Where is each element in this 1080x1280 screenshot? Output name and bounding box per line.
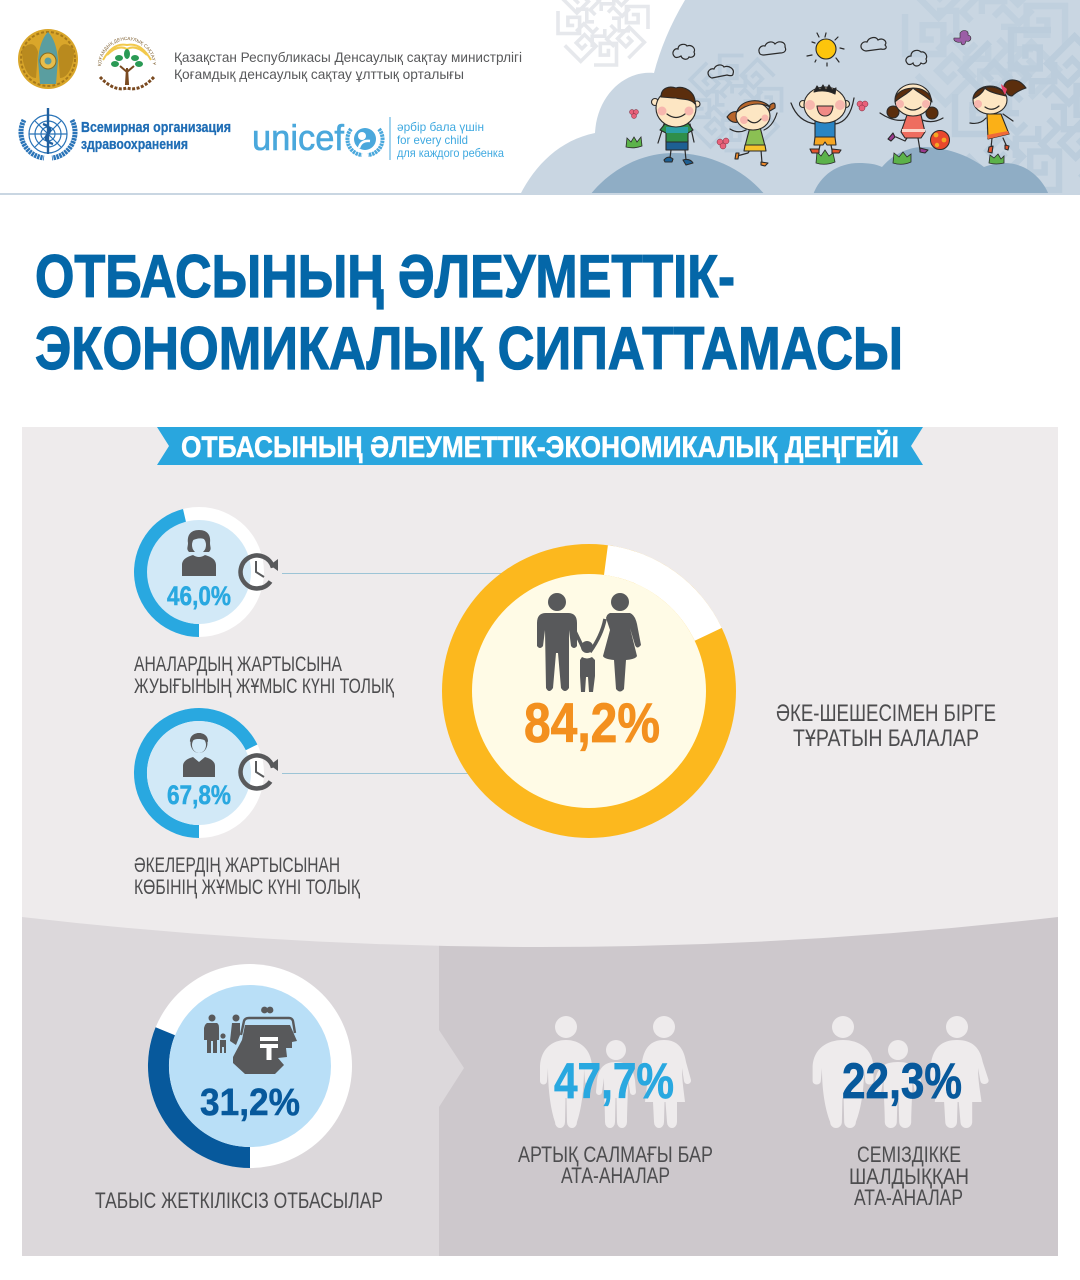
clouds xyxy=(673,38,927,78)
label: fathers: КӨБІНІҢ ЖҰМЫС КҮНІ ТОЛЫҚ xyxy=(134,876,361,899)
kid 3 xyxy=(791,85,854,153)
icon: family and wallet xyxy=(204,1007,297,1074)
icon: obese family xyxy=(813,1016,989,1128)
ministry text xyxy=(174,49,522,82)
butterfly and flowers xyxy=(630,31,971,149)
icon: clock xyxy=(241,555,278,588)
unicef tagline: для каждого ребенка xyxy=(397,146,504,160)
label: obese parents xyxy=(849,1142,969,1210)
value: 47,7% xyxy=(554,1053,674,1109)
sun xyxy=(807,33,844,66)
hills xyxy=(590,147,1049,195)
title xyxy=(35,243,903,382)
label: overweight parents: АТА-АНАЛАР xyxy=(561,1163,670,1188)
kid 1 xyxy=(652,87,700,165)
icon: overweight family xyxy=(540,1016,691,1128)
stat: overweight parents 47,7% xyxy=(540,1016,691,1128)
logo: national public health center xyxy=(98,36,156,90)
WHO text: Всемирная организация xyxy=(81,119,231,136)
value: 84,2% xyxy=(524,691,660,754)
donut: mothers 46,0% xyxy=(134,507,278,637)
title: ОТБАСЫНЫҢ ӘЛЕУМЕТТІК- xyxy=(35,243,735,310)
label: fathers xyxy=(134,854,361,899)
section banner: ОТБАСЫНЫҢ ӘЛЕУМЕТТІК-ЭКОНОМИКАЛЫҚ ДЕҢГЕЙІ xyxy=(181,430,899,464)
ornaments on sky xyxy=(686,0,1080,190)
label: overweight parents: АРТЫҚ САЛМАҒЫ БАР xyxy=(518,1142,713,1167)
panel: lower sections xyxy=(22,900,1058,1256)
label: fathers: ӘКЕЛЕРДІҢ ЖАРТЫСЫНАН xyxy=(134,854,340,877)
logo: coat of arms xyxy=(18,29,78,89)
bottom rule xyxy=(0,193,1080,195)
kid 2 xyxy=(727,101,777,166)
logo: unicef xyxy=(252,117,390,160)
header illustration xyxy=(0,0,1080,195)
ministry text: Қоғамдық денсаулық сақтау ұлттық орталығы xyxy=(174,66,464,82)
stat: obese parents 22,3% xyxy=(813,1016,989,1128)
donut: insufficient income 31,2% xyxy=(148,964,352,1168)
WHO text: здравоохранения xyxy=(81,136,188,153)
icon: clock xyxy=(241,755,278,788)
logo: WHO xyxy=(21,108,75,158)
unicef tagline: әрбір бала үшін xyxy=(397,120,484,134)
value: 22,3% xyxy=(842,1053,962,1109)
label: children: ТҰРАТЫН БАЛАЛАР xyxy=(793,725,979,752)
label: obese parents: АТА-АНАЛАР xyxy=(854,1185,963,1210)
value: 31,2% xyxy=(200,1082,300,1124)
label: mothers: ЖУЫҒЫНЫҢ ЖҰМЫС КҮНІ ТОЛЫҚ xyxy=(134,675,395,698)
ball xyxy=(930,130,950,150)
ministry text: Қазақстан Республикасы Денсаулық сақтау министрлігі xyxy=(174,49,522,65)
grass xyxy=(626,137,1004,164)
label: insufficient income: ТАБЫС ЖЕТКІЛІКСІЗ ОТБАСЫЛАР xyxy=(95,1188,383,1213)
icon: woman xyxy=(182,530,216,576)
value: 67,8% xyxy=(167,780,231,810)
connector lines xyxy=(282,574,505,774)
unicef tagline xyxy=(397,120,504,160)
label: mothers: АНАЛАРДЫҢ ЖАРТЫСЫНА xyxy=(134,653,342,676)
sky shape xyxy=(520,0,1080,195)
label: children xyxy=(776,700,996,752)
panel: upper section xyxy=(22,427,1058,947)
donut: children with both parents 84,2% xyxy=(442,544,736,838)
title: ЭКОНОМИКАЛЫҚ СИПАТТАМАСЫ xyxy=(35,315,903,382)
label: obese parents: ШАЛДЫҚҚАН xyxy=(849,1164,969,1189)
kid 5 xyxy=(970,80,1026,153)
unicef tagline: for every child xyxy=(397,133,468,147)
kid 4 xyxy=(880,84,943,153)
value: 46,0% xyxy=(167,581,231,611)
ornament: white area xyxy=(558,0,648,65)
label: mothers xyxy=(134,653,395,698)
label: obese parents: СЕМІЗДІККЕ xyxy=(857,1142,961,1167)
WHO text xyxy=(81,119,231,153)
label: overweight parents xyxy=(518,1142,713,1188)
icon: family xyxy=(537,593,641,692)
logo: unicef: unicef xyxy=(252,117,345,158)
label: children: ӘКЕ-ШЕШЕСІМЕН БІРГЕ xyxy=(776,700,996,727)
donut: fathers 67,8% xyxy=(134,708,278,838)
icon: man xyxy=(183,733,215,777)
